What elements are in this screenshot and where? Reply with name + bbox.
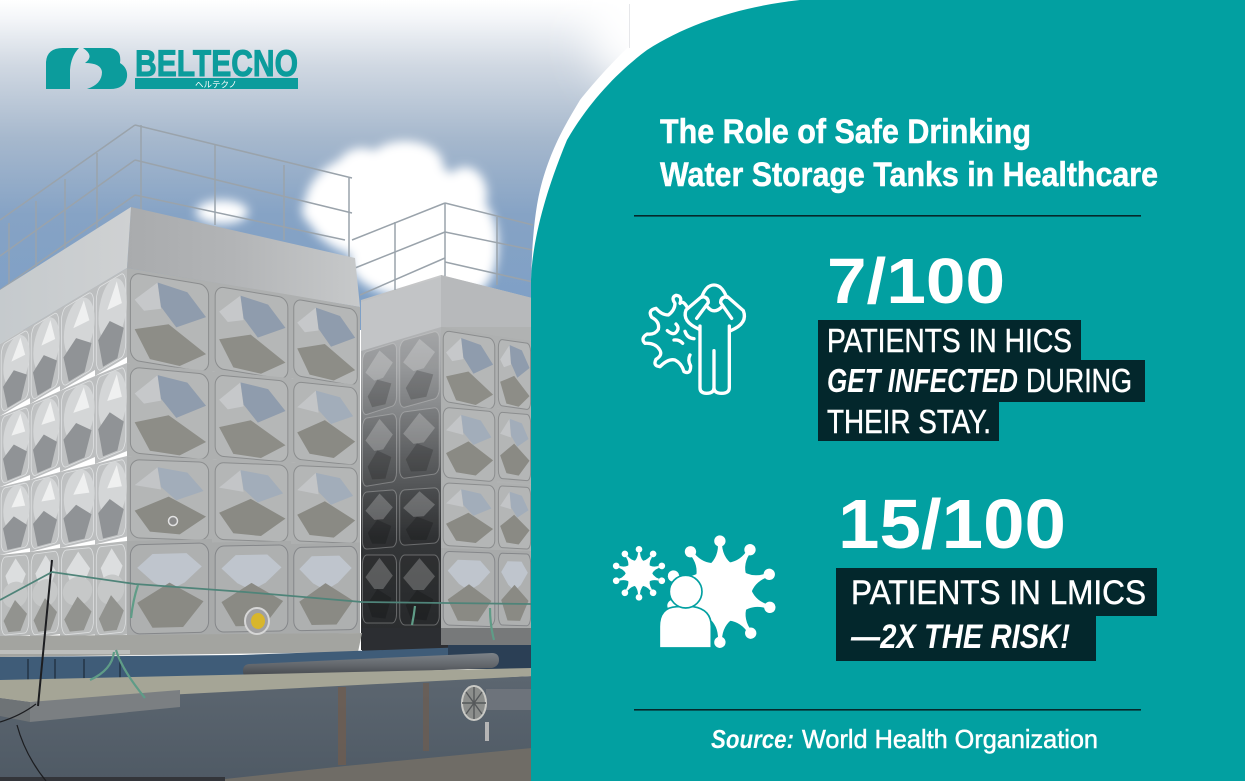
logo mark (46, 48, 127, 89)
front tank right face panels (127, 268, 360, 638)
callout: HICS patients: GET INFECTED (827, 362, 1018, 399)
front tank left face panels (0, 268, 127, 638)
person (659, 575, 711, 648)
ropes and pole (0, 560, 532, 781)
logo: Beltecno (46, 43, 298, 90)
tank base and blue steel frame (0, 633, 532, 683)
callout: HICS patients: DURING (1026, 362, 1132, 399)
pipe (243, 653, 499, 678)
source line: Source: (711, 724, 794, 754)
stat: 7/100: 7/100 (827, 245, 1005, 317)
concrete wall and ledge (0, 668, 532, 781)
small virus (611, 546, 667, 601)
valve (462, 686, 489, 741)
icon: person with viruses (611, 535, 780, 648)
teal panel (531, 0, 1245, 781)
divider bottom (634, 709, 1141, 711)
callout: LMICS patients: PATIENTS IN LMICS (851, 574, 1146, 612)
callout: HICS patients: THEIR STAY. (827, 403, 991, 440)
sky (0, 0, 640, 330)
stat: 15/100: 15/100 (838, 485, 1066, 563)
back tank (361, 275, 532, 652)
clouds (196, 141, 498, 298)
photo: stainless steel water tanks (0, 0, 712, 781)
title (660, 113, 1158, 194)
callout: HICS patients: PATIENTS IN HICS (827, 322, 1072, 359)
callout: LMICS patients: —2X THE RISK! (850, 618, 1070, 656)
logo bar (135, 78, 298, 89)
logo katakana: ヘルテクノ (195, 80, 237, 90)
front tank top band (127, 207, 360, 307)
faint photo edge (629, 4, 630, 48)
guard rails (0, 125, 533, 295)
tank bolt (168, 516, 178, 526)
callout: HICS patients (818, 320, 1145, 441)
white curved border (531, 0, 1245, 300)
large virus (663, 535, 780, 648)
icon: infected person with virus (643, 285, 744, 393)
source line: World Health Organization (802, 724, 1098, 754)
logo wordmark: BELTECNO (135, 43, 298, 84)
yellow inspection port (245, 608, 269, 634)
title: The Role of Safe Drinking (660, 113, 1031, 151)
title: Water Storage Tanks in Healthcare (660, 156, 1158, 194)
callout: LMICS patients (836, 568, 1157, 661)
divider top (634, 215, 1141, 217)
